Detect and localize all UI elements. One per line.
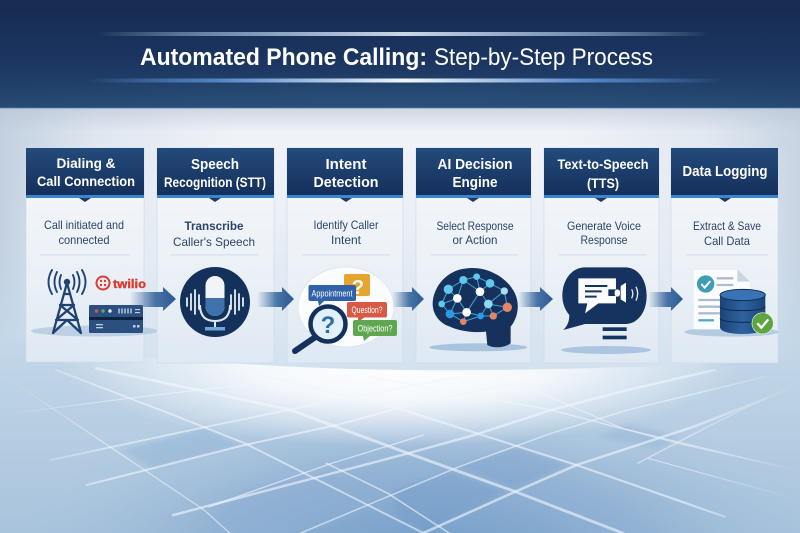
- description: [44, 218, 124, 247]
- description: or Action: [452, 233, 498, 247]
- icon: twilio logo: [96, 276, 146, 291]
- perspective floor grid: [0, 332, 800, 533]
- icon: intent bubbles and magnifier: [295, 267, 397, 351]
- description: Intent: [331, 233, 362, 247]
- heading: Speech: [191, 156, 239, 173]
- heading: [314, 156, 378, 191]
- heading: Call Connection: [37, 173, 135, 189]
- description: Transcribe: [184, 219, 244, 233]
- heading: Text-to-Speech: [558, 156, 648, 172]
- page background: [0, 108, 800, 533]
- question bubble: Question?: [352, 305, 382, 315]
- magnifier: ?: [321, 312, 335, 339]
- card header: [157, 148, 274, 202]
- arrow: step 5 to 6: [648, 287, 683, 311]
- card body: [544, 148, 659, 363]
- card body: [157, 148, 274, 363]
- heading: [438, 156, 512, 191]
- card header: [416, 148, 531, 202]
- heading: Recognition (STT): [164, 174, 266, 190]
- icon: speech bubble with speaker: [561, 267, 651, 354]
- description: connected: [58, 233, 110, 247]
- arrow: step 3 to 4: [392, 287, 424, 311]
- description: Select Response: [436, 219, 514, 233]
- card body: [26, 148, 144, 362]
- description: Extract & Save: [693, 219, 761, 233]
- description: [314, 218, 378, 247]
- step 1: dialing and call connection: [26, 148, 159, 362]
- appointment bubble: Appointment: [312, 288, 353, 298]
- arrow: step 1 to 2: [130, 287, 176, 311]
- description: [567, 219, 641, 247]
- step 2: speech recognition: [157, 148, 274, 363]
- card body: [671, 148, 778, 363]
- arrow: step 4 to 5: [518, 287, 553, 311]
- heading: [164, 156, 266, 190]
- card header: [544, 148, 659, 202]
- heading: Detection: [314, 174, 378, 191]
- description: Generate Voice: [567, 219, 641, 233]
- description: Call initiated and: [44, 218, 124, 232]
- icon: cell tower: [31, 270, 159, 336]
- panel backdrop: [144, 257, 700, 370]
- description: [436, 219, 514, 247]
- description: Response: [580, 233, 628, 247]
- icon: server: [89, 305, 143, 333]
- header band: [0, 0, 800, 108]
- step 5: text-to-speech: [544, 148, 659, 363]
- heading: Engine: [452, 174, 498, 191]
- heading: Intent: [326, 156, 367, 173]
- heading: [37, 155, 135, 189]
- card body: [416, 148, 531, 363]
- title: Step-by-Step Process: [434, 44, 653, 71]
- icon: twilio logo: twilio: [113, 277, 146, 291]
- description: Call Data: [704, 234, 750, 248]
- description: [173, 219, 255, 249]
- heading: [558, 156, 648, 191]
- objection bubble: Objection?: [358, 324, 392, 334]
- heading: Data Logging: [682, 163, 768, 180]
- heading: AI Decision: [438, 156, 512, 173]
- card header: [671, 148, 778, 202]
- card header: [287, 148, 403, 202]
- title: Automated Phone Calling:: [140, 44, 427, 71]
- icon: AI brain network: [429, 268, 527, 351]
- icon: documents and database: [684, 269, 779, 337]
- heading: Dialing &: [56, 155, 116, 171]
- icon: microphone with sound waves: [180, 267, 250, 337]
- heading: (TTS): [587, 175, 619, 191]
- step 3: intent detection: [287, 148, 403, 363]
- description: Caller's Speech: [173, 235, 255, 249]
- yellow question bubble: ?: [352, 277, 364, 299]
- step 4: AI decision engine: [416, 148, 531, 363]
- description: [693, 219, 761, 248]
- card body: [287, 148, 403, 363]
- arrow: step 2 to 3: [257, 287, 294, 311]
- description: Identify Caller: [314, 218, 378, 232]
- step 6: data logging: [671, 148, 779, 363]
- card header: [26, 148, 144, 202]
